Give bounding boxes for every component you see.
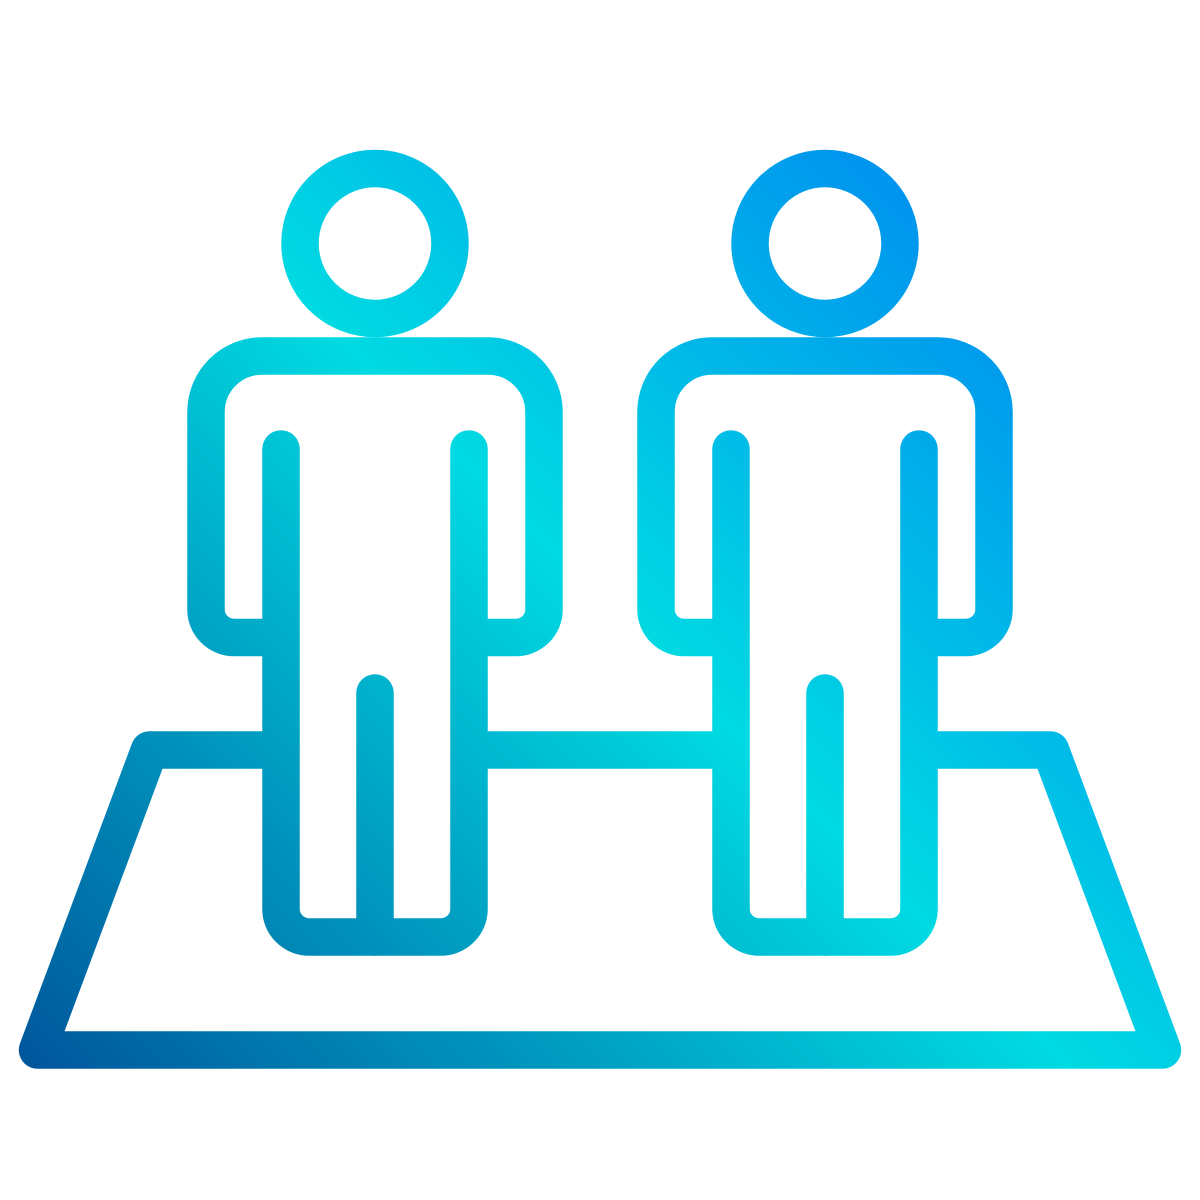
right person torso and legs bbox=[731, 449, 919, 937]
left person bbox=[206, 168, 544, 937]
left person head bbox=[300, 168, 450, 318]
right person bbox=[656, 168, 994, 937]
left person shoulders and arms bbox=[206, 356, 544, 638]
right person leg divider bbox=[806, 693, 844, 937]
right person head bbox=[750, 168, 900, 318]
floor mat bbox=[38, 750, 1162, 1050]
left person leg divider bbox=[356, 693, 394, 937]
right person shoulders and arms bbox=[656, 356, 994, 638]
left person torso and legs bbox=[281, 449, 469, 937]
